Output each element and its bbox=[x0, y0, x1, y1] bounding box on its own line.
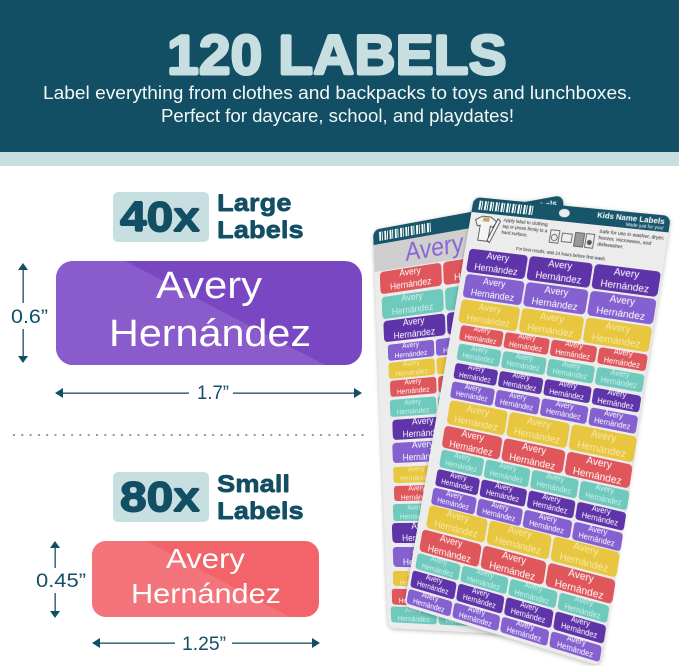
front label sheet: Avery bbox=[473, 326, 491, 336]
back label sheet: Hernández bbox=[447, 597, 481, 608]
front label sheet: Avery bbox=[476, 569, 494, 581]
front label sheet: Avery bbox=[471, 587, 490, 600]
front label sheet: Avery bbox=[507, 524, 533, 542]
front label sheet: Avery bbox=[570, 616, 590, 629]
back label sheet: Hernández bbox=[393, 325, 435, 342]
front label sheet: Hernández bbox=[526, 321, 574, 340]
front sheet label rows bbox=[406, 248, 661, 662]
back label sheet: Hernández bbox=[395, 366, 428, 378]
back label sheet: Hernández bbox=[395, 348, 427, 360]
subtitle bbox=[43, 83, 632, 126]
back label sheet: Hernández bbox=[397, 614, 430, 624]
front label sheet: Avery bbox=[464, 384, 482, 394]
front label sheet: Hernández bbox=[441, 478, 473, 493]
large labels heading: Large bbox=[217, 190, 292, 217]
front label sheet: Hernández bbox=[466, 312, 511, 330]
front label sheet: Avery bbox=[501, 549, 527, 567]
back label sheet: Avery bbox=[404, 396, 421, 407]
back label sheet: Avery bbox=[402, 340, 419, 351]
front label sheet: Hernández bbox=[591, 331, 642, 351]
front label sheet: Hernández bbox=[448, 438, 494, 459]
dimension: 0.6 inch height: 0.6” bbox=[11, 307, 48, 328]
front label sheet: Avery bbox=[607, 389, 627, 400]
front label sheet: Hernández bbox=[536, 480, 572, 496]
front label sheet: Hernández bbox=[489, 470, 523, 485]
front label sheet: Hernández bbox=[455, 390, 488, 404]
front label sheet: Hernández bbox=[535, 269, 582, 286]
front label sheet: Hernández bbox=[464, 333, 497, 346]
back label sheet: Avery bbox=[451, 334, 469, 345]
application instructions: Apply label to clothing tag or press firmly to a hard surface. bbox=[501, 218, 548, 238]
front sheet header bbox=[471, 197, 671, 232]
back label sheet: Hernández bbox=[397, 384, 430, 396]
large labels heading: 40x bbox=[120, 193, 200, 240]
back label sheet: Avery bbox=[451, 353, 470, 364]
front label sheet: Avery bbox=[564, 341, 583, 351]
front label sheet: Avery bbox=[467, 364, 485, 375]
front label sheet: Hernández bbox=[603, 356, 641, 370]
front label sheet: Hernández bbox=[466, 575, 501, 592]
header banner bbox=[0, 0, 679, 166]
back label sheet: Hernández bbox=[445, 616, 480, 627]
large labels heading bbox=[113, 190, 304, 244]
front label sheet: Avery bbox=[555, 401, 574, 412]
back label sheet: Hernández bbox=[445, 380, 480, 392]
front label sheet: Hernández bbox=[585, 491, 622, 507]
title: 120 LABELS bbox=[167, 23, 507, 86]
front label sheet: Avery bbox=[548, 258, 573, 272]
front label sheet: Hernández bbox=[529, 520, 564, 536]
front label sheet: Hernández bbox=[488, 559, 536, 583]
icon: shirt and bottle bbox=[475, 216, 501, 244]
front label sheet: Hernández bbox=[421, 562, 454, 579]
front label sheet: Hernández bbox=[470, 286, 515, 304]
front label sheet: Hernández bbox=[531, 295, 578, 313]
back label sheet: Avery bbox=[453, 392, 471, 403]
front label sheet: Avery bbox=[586, 454, 613, 471]
front label sheet: Hernández bbox=[506, 360, 540, 373]
front label sheet: Hernández bbox=[458, 612, 492, 629]
front label sheet: Avery bbox=[604, 410, 623, 421]
front label sheet: Avery bbox=[518, 334, 536, 344]
front label sheet: Hernández bbox=[576, 438, 627, 460]
front label sheet: Avery bbox=[542, 493, 561, 505]
back label sheet: Hernández bbox=[400, 511, 433, 521]
front label sheet: Avery bbox=[478, 301, 502, 316]
front label sheet: Avery bbox=[425, 574, 443, 586]
small labels heading bbox=[113, 471, 304, 525]
front label sheet: Avery bbox=[467, 605, 486, 618]
front label sheet: Hernández bbox=[462, 594, 496, 611]
front sheet header: Made just for you! bbox=[625, 221, 664, 231]
front label sheet: Avery bbox=[605, 320, 632, 336]
back label sheet: Avery bbox=[403, 358, 420, 369]
small labels heading: Labels bbox=[217, 498, 304, 525]
large purple label bbox=[56, 261, 362, 365]
front label sheet: Avery bbox=[439, 532, 463, 550]
front label sheet: Avery bbox=[498, 463, 517, 474]
back label sheet: Avery bbox=[466, 281, 489, 296]
front label sheet: Hernández bbox=[532, 500, 568, 516]
front label sheet: Avery bbox=[561, 361, 581, 371]
large purple label: Hernández bbox=[109, 313, 311, 355]
front label sheet: Avery bbox=[591, 505, 611, 517]
front label sheet: Avery bbox=[521, 440, 547, 457]
icons: washer, dryer, freezer, microwave bbox=[548, 229, 596, 249]
front label sheet: Hernández bbox=[572, 464, 623, 487]
front label sheet: Hernández bbox=[514, 588, 550, 606]
front label sheet: Avery bbox=[613, 266, 640, 281]
front label sheet: Hernández bbox=[510, 608, 546, 625]
front label sheet: Hernández bbox=[416, 580, 449, 597]
front label sheet: Hernández bbox=[555, 348, 590, 361]
front label sheet: Hernández bbox=[485, 489, 520, 504]
back sheet label rows bbox=[380, 254, 512, 627]
dimension: 0.45 inch height: 0.45” bbox=[36, 571, 86, 592]
back label sheet: Hernández bbox=[448, 510, 483, 520]
front label sheet: Avery bbox=[515, 353, 533, 363]
small labels heading: Small bbox=[217, 471, 290, 498]
small red label: Avery bbox=[166, 543, 245, 574]
front label sheet: Hernández bbox=[508, 451, 556, 473]
front label sheet: Avery bbox=[512, 372, 530, 383]
front label sheet: Hernández bbox=[600, 277, 650, 295]
back label sheet: Hernández bbox=[445, 401, 480, 413]
back sheet header: Kids Name Labels bbox=[487, 198, 557, 221]
front label sheet: Hernández bbox=[559, 550, 609, 576]
front label sheet: Hernández bbox=[499, 399, 534, 413]
front label sheet: Hernández bbox=[433, 518, 478, 541]
front label sheet: Hernández bbox=[552, 368, 588, 382]
front label sheet: Avery bbox=[516, 620, 535, 633]
front label sheet: Hernández bbox=[458, 371, 491, 384]
front label sheet: Avery bbox=[588, 525, 608, 537]
back sheet header bbox=[373, 195, 564, 245]
front label sheet: Avery bbox=[613, 349, 633, 359]
front label sheet: Avery bbox=[449, 472, 467, 483]
back label sheet: Avery bbox=[399, 265, 421, 279]
front label sheet: Hernández bbox=[578, 532, 615, 549]
front label sheet: Hernández bbox=[545, 408, 581, 422]
back label sheet: Avery bbox=[468, 306, 491, 320]
front label sheet: Avery bbox=[524, 582, 543, 595]
front label sheet: Hernández bbox=[445, 459, 477, 474]
front label sheet: Avery bbox=[509, 392, 527, 403]
front label sheet: Hernández bbox=[462, 352, 494, 365]
large purple label: Avery bbox=[156, 265, 262, 307]
front label sheet: Hernández bbox=[494, 534, 542, 558]
front label sheet: Avery bbox=[446, 508, 470, 526]
front label sheet: Avery bbox=[526, 415, 552, 431]
front sheet header: Kids Name Labels bbox=[597, 210, 665, 226]
front label sheet: Avery bbox=[491, 501, 509, 513]
back label sheet: Hernández bbox=[448, 471, 483, 481]
front label sheet: Hernández bbox=[581, 512, 619, 528]
front label sheet: Avery bbox=[558, 381, 577, 392]
front label sheet: Avery bbox=[520, 601, 539, 614]
front label sheet: Avery bbox=[545, 473, 565, 485]
front label sheet: Avery bbox=[566, 635, 586, 648]
front label sheet: Avery bbox=[609, 293, 636, 308]
back label sheet: Avery bbox=[401, 290, 423, 305]
front label sheet: Avery bbox=[610, 369, 630, 380]
back label sheet: Hernández bbox=[390, 276, 432, 293]
small labels heading: 80x bbox=[120, 473, 200, 520]
back label sheet: Avery bbox=[404, 377, 421, 387]
dimension: 1.7 inch width: 1.7” bbox=[197, 383, 229, 404]
front label sheet: Hernández bbox=[506, 626, 542, 644]
dimension: 0.45 inch height bbox=[36, 541, 86, 618]
front label sheet: Avery bbox=[486, 250, 510, 264]
back label sheet: Hernández bbox=[467, 422, 512, 436]
front label sheet: Avery bbox=[461, 428, 485, 444]
dimension: 1.25 inch width bbox=[92, 634, 320, 655]
back label sheet: Hernández bbox=[454, 265, 499, 284]
dimension: 1.25 inch width: 1.25” bbox=[182, 634, 226, 655]
back label sheet: Hernández bbox=[399, 596, 431, 606]
front label sheet: Hernández bbox=[597, 397, 634, 411]
front label sheet: Hernández bbox=[474, 261, 519, 278]
front label sheet: Hernández bbox=[513, 425, 561, 447]
large labels heading: Labels bbox=[217, 217, 304, 244]
front label sheet: Hernández bbox=[503, 379, 537, 393]
front label sheet: Avery bbox=[495, 482, 513, 494]
back label sheet: Hernández bbox=[456, 292, 501, 310]
back label sheet: Hernández bbox=[392, 301, 434, 318]
front label sheet: Hernández bbox=[560, 622, 598, 641]
front label sheet: Avery bbox=[590, 427, 617, 445]
front label sheet: Avery bbox=[539, 310, 565, 325]
front label sheet: Avery bbox=[421, 592, 439, 604]
back label sheet: Hernández bbox=[444, 361, 478, 374]
front label sheet: Hernández bbox=[427, 542, 472, 566]
small red label: Hernández bbox=[131, 578, 281, 609]
back label sheet: Hernández bbox=[458, 317, 503, 334]
front label sheet: Hernández bbox=[564, 602, 601, 621]
front label sheet: Avery bbox=[544, 284, 569, 299]
front label sheet: Hernández bbox=[595, 304, 646, 323]
small red label bbox=[92, 541, 319, 617]
wash note: For best results, wait 24 hours before first wash. bbox=[516, 246, 606, 262]
front label sheet: Hernández bbox=[554, 576, 604, 602]
back label sheet: Avery bbox=[403, 315, 425, 328]
front label sheet: Hernández bbox=[508, 341, 543, 353]
dimension: 1.7 inch width bbox=[55, 383, 362, 404]
front label sheet: Avery bbox=[572, 540, 599, 559]
front label sheet: Hernández bbox=[412, 598, 445, 615]
back label sheet: Hernández bbox=[400, 473, 433, 483]
front label sheet: Avery bbox=[430, 556, 447, 568]
front label sheet: Avery bbox=[538, 513, 557, 525]
front label sheet: Hernández bbox=[549, 388, 584, 402]
front label sheet: Hernández bbox=[437, 497, 469, 512]
front label sheet: Avery bbox=[574, 596, 594, 609]
subtitle: Perfect for daycare, school, and playdates! bbox=[161, 106, 514, 126]
back label sheet: Avery bbox=[453, 372, 471, 383]
dimension: 0.6 inch height bbox=[11, 263, 48, 363]
front label sheet bbox=[404, 197, 671, 666]
back label sheet: Avery bbox=[464, 254, 488, 270]
front label sheet: Avery bbox=[595, 484, 615, 496]
front label sheet: Hernández bbox=[556, 641, 594, 660]
back label sheet: Hernández bbox=[397, 405, 430, 416]
front label sheet: Hernández bbox=[600, 376, 637, 390]
front label sheet: Hernández bbox=[482, 508, 516, 524]
subtitle: Label everything from clothes and backpacks to toys and lunchboxes. bbox=[43, 83, 632, 103]
back label sheet: Hernández bbox=[443, 342, 478, 355]
safety instructions: Safe for use in washer, dryer, freezer, microwave, and dishwasher. bbox=[597, 230, 665, 250]
back label sheet bbox=[373, 195, 578, 638]
front label sheet: Avery bbox=[466, 403, 490, 419]
front label sheet: Avery bbox=[567, 566, 595, 585]
front label sheet: Avery bbox=[482, 276, 507, 290]
front label sheet: Avery bbox=[454, 453, 471, 464]
front label sheet: Avery bbox=[445, 490, 463, 502]
front label sheet: Hernández bbox=[453, 413, 499, 434]
front label sheet: Avery bbox=[471, 345, 488, 355]
front label sheet: Hernández bbox=[594, 417, 631, 432]
left column: label sizes bbox=[11, 261, 364, 655]
